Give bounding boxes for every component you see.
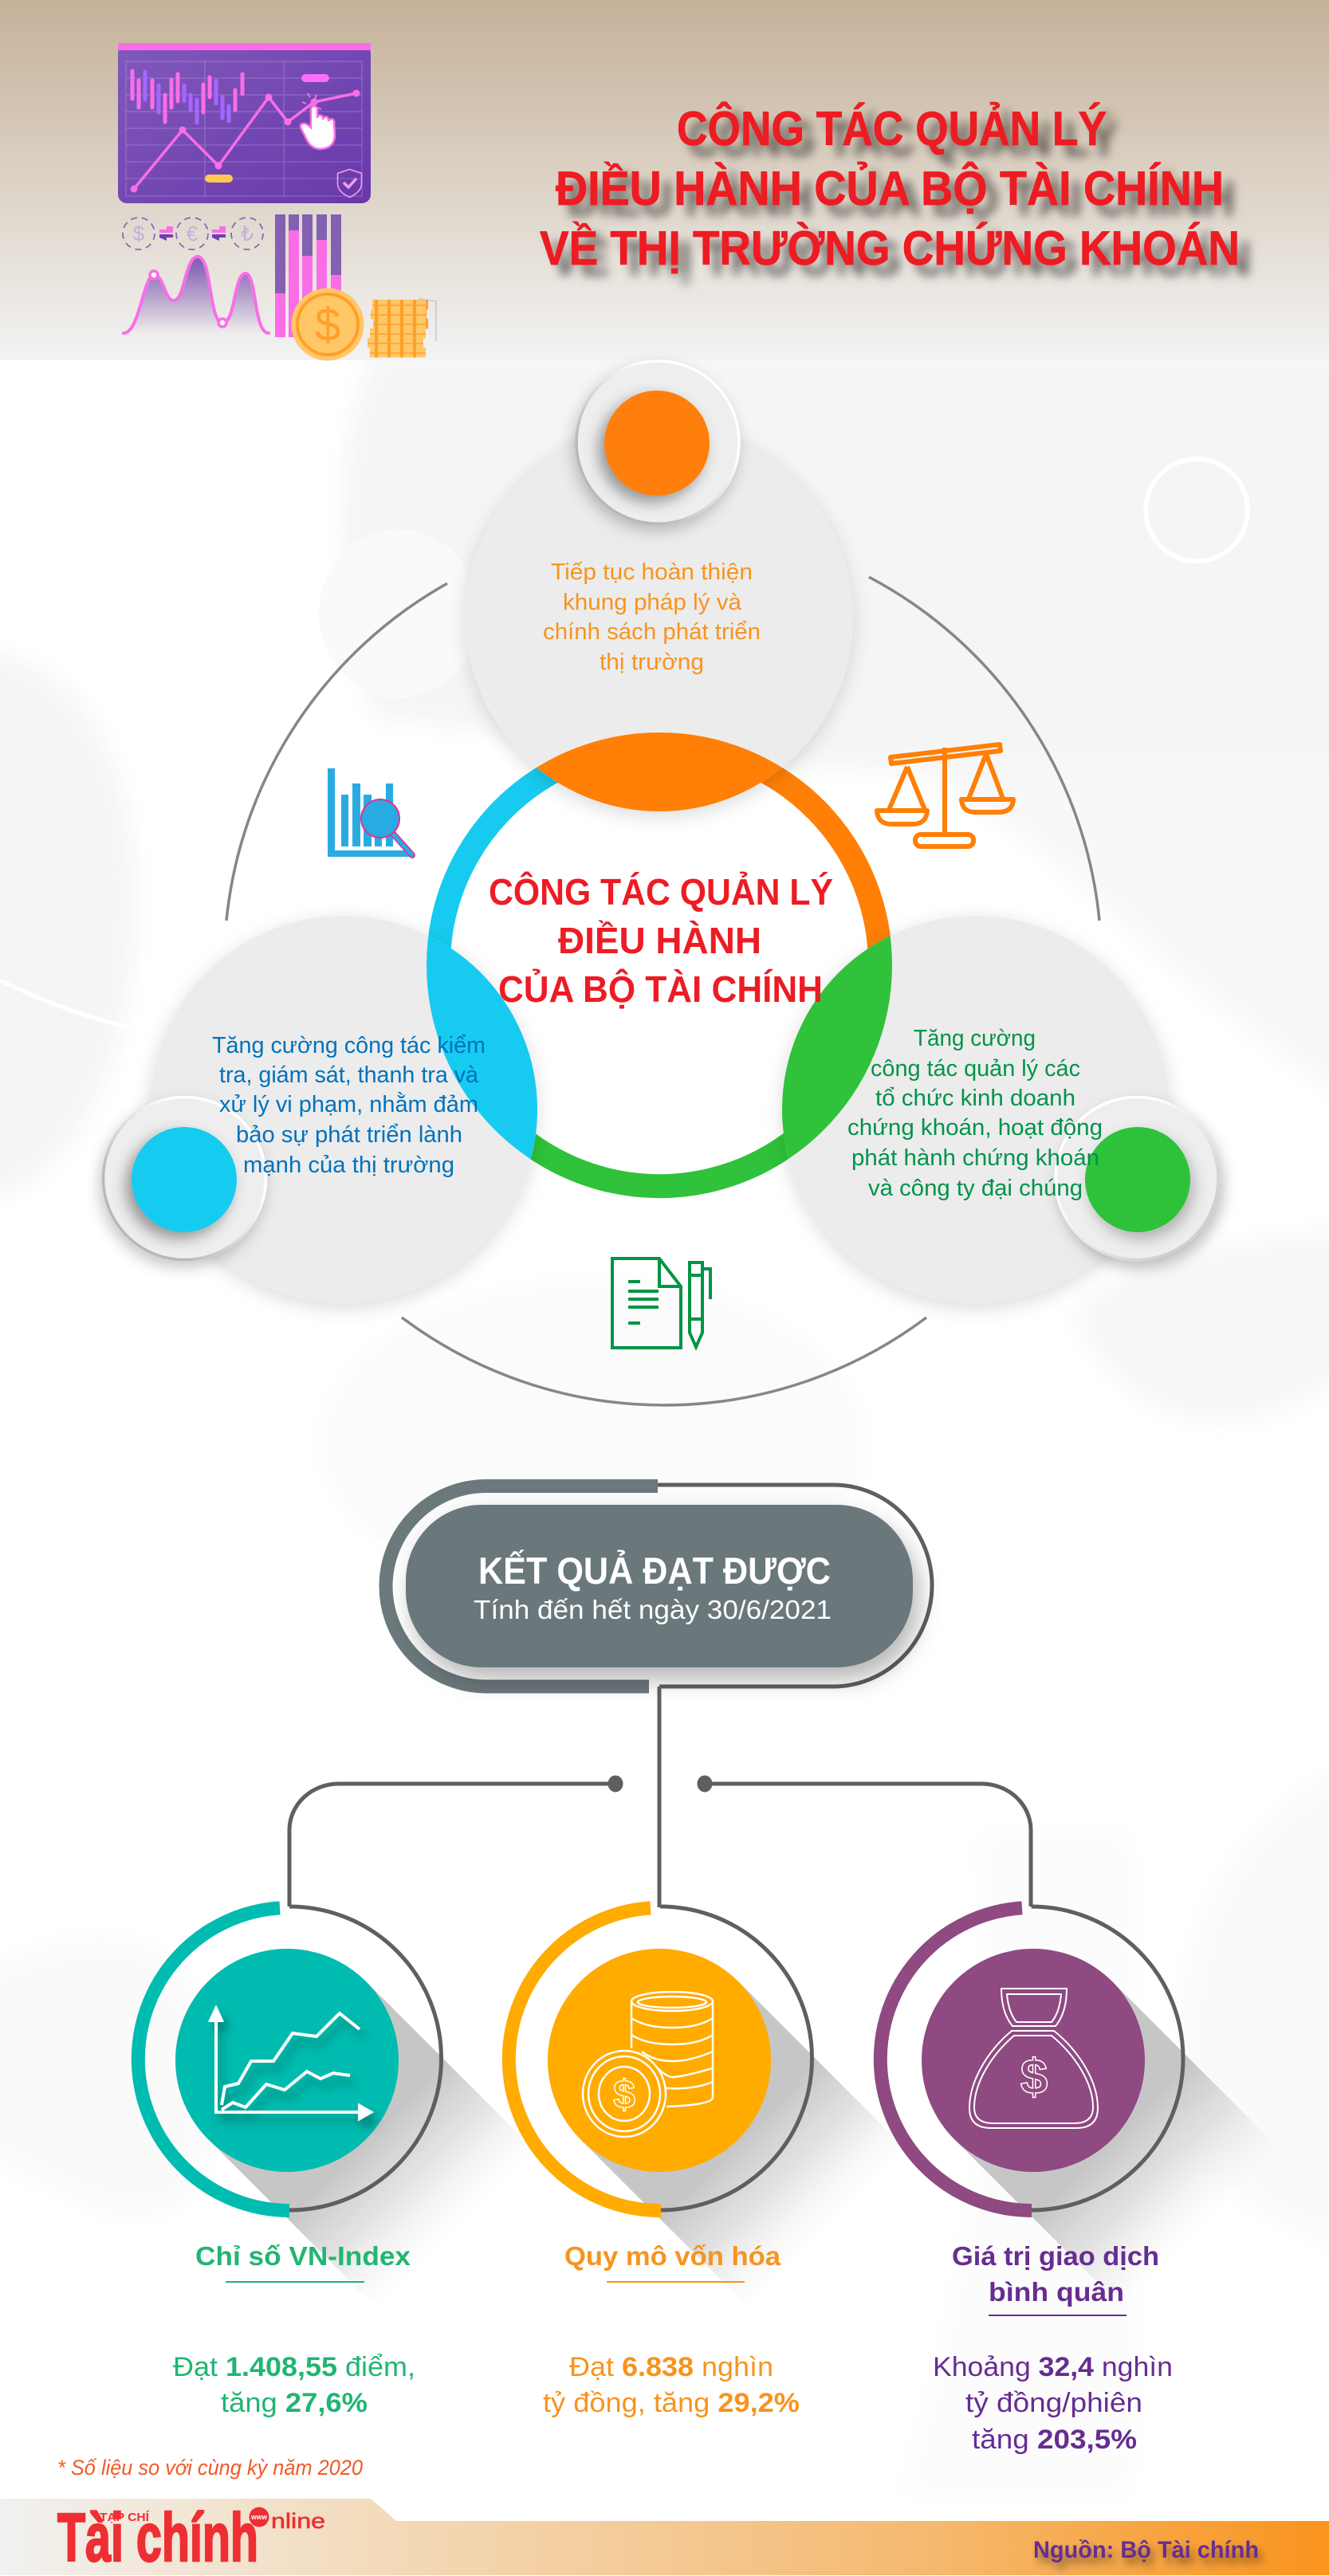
connector lines — [289, 1687, 1031, 1907]
title: CÔNG TÁC QUẢN LÝ — [677, 102, 1107, 155]
header band — [0, 0, 1329, 360]
label: trading value: Giá trị giao dịch — [952, 2241, 1159, 2271]
source: Nguồn: Bộ Tài chính — [1033, 2537, 1259, 2563]
illustration: stacked bars — [275, 214, 341, 337]
icon: blue dot — [104, 1097, 266, 1259]
text: market organisations: phát hành chứng khoán — [851, 1145, 1099, 1171]
pill heading: KẾT QUẢ ĐẠT ĐƯỢC — [478, 1549, 831, 1592]
ring lenses — [427, 732, 892, 1198]
text: market organisations: tổ chức kinh doanh — [875, 1086, 1075, 1111]
central ring — [438, 744, 880, 1186]
pill subheading: Tính đến hết ngày 30/6/2021 — [474, 1595, 832, 1624]
outer arcs — [226, 577, 1099, 1405]
illustration: currency exchange — [123, 218, 263, 249]
central title: CỦA BỘ TÀI CHÍNH — [498, 968, 823, 1010]
icon: gold coin: $ — [315, 299, 340, 351]
icon: scales — [877, 744, 1013, 846]
label: trading value: bình quân — [989, 2277, 1124, 2307]
icon: gold coin — [292, 289, 364, 360]
value: trading value: tỷ đồng/phiên — [965, 2388, 1142, 2418]
value: market cap — [543, 2352, 800, 2418]
value: VN-Index: tăng 27,6% — [221, 2388, 368, 2418]
central title: CÔNG TÁC QUẢN LÝ — [489, 871, 833, 913]
text: inspection — [212, 1033, 486, 1178]
text: inspection: xử lý vi phạm, nhằm đảm — [219, 1091, 478, 1117]
illustration: currency exchange: € — [187, 222, 199, 245]
footer band — [0, 2499, 1329, 2575]
illustration: wave chart — [124, 257, 269, 333]
value: market cap: Đạt 6.838 nghìn — [569, 2352, 773, 2382]
label: market cap: Quy mô vốn hóa — [564, 2241, 781, 2271]
metric circle: trading value — [880, 1906, 1282, 2309]
illustration: trading dashboard — [118, 43, 371, 203]
value: trading value: tăng 203,5% — [972, 2425, 1137, 2455]
central title — [489, 871, 833, 1010]
text: legal framework: Tiếp tục hoàn thiện — [551, 560, 753, 585]
text: inspection: tra, giám sát, thanh tra và — [219, 1062, 479, 1088]
text: legal framework: khung pháp lý và — [563, 590, 742, 615]
logo: Tài chính — [57, 2500, 258, 2576]
label: trading value — [952, 2241, 1159, 2316]
value: trading value — [933, 2352, 1173, 2455]
title: ĐIỀU HÀNH CỦA BỘ TÀI CHÍNH — [556, 162, 1224, 215]
text: inspection: Tăng cường công tác kiểm — [212, 1033, 486, 1058]
text: legal framework — [543, 560, 761, 675]
logo: nline — [271, 2509, 325, 2533]
icon: green dot — [1056, 1097, 1218, 1259]
label: VN-Index: Chỉ số VN-Index — [195, 2241, 411, 2271]
text: market organisations: chứng khoán, hoạt động — [847, 1115, 1103, 1141]
text: inspection: bảo sự phát triển lành — [236, 1122, 462, 1148]
value: VN-Index — [173, 2352, 415, 2418]
icon: document and pen — [612, 1259, 710, 1348]
value: trading value: Khoảng 32,4 nghìn — [933, 2352, 1173, 2382]
title — [540, 102, 1240, 275]
icon: orange dot — [576, 361, 739, 524]
results pill — [386, 1485, 932, 1687]
icon: line chart — [210, 2009, 371, 2119]
text: legal framework: chính sách phát triển — [543, 619, 761, 645]
icon: money bag — [969, 1989, 1098, 2128]
icon: coin stack — [368, 299, 436, 357]
panel: market organisations circle — [782, 916, 1170, 1303]
metric circle: VN-Index — [138, 1906, 536, 2309]
logo: TẠP CHÍ — [100, 2511, 150, 2524]
value: VN-Index: Đạt 1.408,55 điểm, — [173, 2352, 415, 2382]
panel: inspection circle — [150, 916, 537, 1303]
logo: www — [250, 2513, 268, 2521]
illustration: currency exchange: $ — [133, 222, 145, 245]
icon: coins: $ — [613, 2072, 635, 2117]
text: legal framework: thị trường — [600, 650, 704, 675]
value: market cap: tỷ đồng, tăng 29,2% — [543, 2388, 800, 2418]
icon: money bag: $ — [1020, 2050, 1048, 2105]
text: market organisations: và công ty đại chúng — [868, 1176, 1083, 1201]
illustration: currency exchange: ₺ — [241, 222, 254, 245]
text: market organisations: công tác quản lý các — [871, 1056, 1080, 1082]
central title: ĐIỀU HÀNH — [558, 920, 761, 961]
icon: bar chart with magnifier — [328, 768, 412, 857]
text: inspection: mạnh của thị trường — [243, 1153, 454, 1178]
panel: legal framework circle — [466, 424, 853, 811]
title: VỀ THỊ TRƯỜNG CHỨNG KHOÁN — [540, 222, 1240, 275]
footnote: * Số liệu so với cùng kỳ năm 2020 — [57, 2456, 363, 2480]
text: market organisations: Tăng cường — [914, 1026, 1036, 1051]
text: market organisations — [847, 1026, 1103, 1201]
metric circle: market cap — [509, 1906, 908, 2309]
icon: coins — [583, 1992, 713, 2137]
